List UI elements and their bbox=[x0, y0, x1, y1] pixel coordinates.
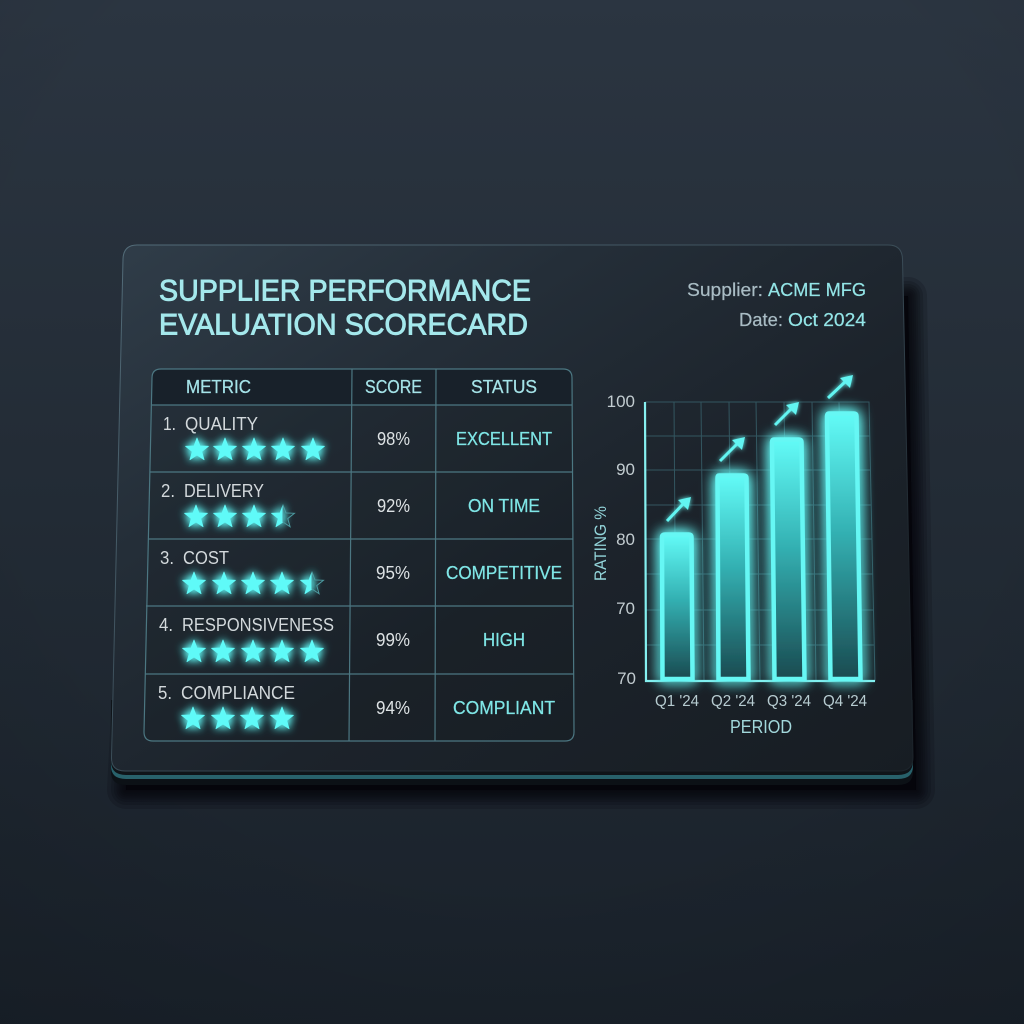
row 4: responsiveness: 4. bbox=[159, 615, 173, 635]
x-axis labels: Q2 '24 bbox=[711, 693, 755, 710]
row 2: delivery: 92% bbox=[377, 496, 410, 516]
y-axis labels: 90 bbox=[616, 460, 635, 479]
stars: quality bbox=[186, 438, 324, 460]
arrow: Q2 trend bbox=[720, 437, 745, 461]
row 1: quality: 1. bbox=[163, 414, 176, 434]
row 3: cost: COMPETITIVE bbox=[446, 563, 562, 583]
row 2: delivery bbox=[161, 481, 540, 527]
row 1: quality: 98% bbox=[377, 429, 410, 449]
supplier and date details: Oct 2024 bbox=[788, 310, 866, 330]
table header labels bbox=[186, 377, 537, 397]
row 2: delivery: DELIVERY bbox=[184, 481, 264, 501]
panel: scorecard bbox=[111, 245, 916, 790]
supplier and date details: Supplier: bbox=[687, 280, 763, 300]
row 5: compliance bbox=[158, 683, 555, 729]
panel surface bbox=[111, 245, 913, 771]
table body tint bbox=[144, 405, 574, 741]
x-axis title: PERIOD bbox=[730, 717, 792, 737]
y-axis title: RATING % bbox=[591, 506, 610, 581]
arrow: Q4 trend bbox=[828, 375, 853, 398]
table header labels: STATUS bbox=[471, 377, 537, 397]
chart grid bbox=[645, 402, 875, 681]
y-axis labels bbox=[607, 392, 636, 688]
chart axes bbox=[645, 402, 875, 681]
arrow: Q3 trend bbox=[775, 402, 799, 425]
row 3: cost: 3. bbox=[160, 548, 174, 568]
y-axis labels: 70 bbox=[617, 669, 636, 688]
x-axis labels bbox=[655, 693, 867, 710]
row 3: cost: COST bbox=[183, 548, 229, 568]
table: metrics bbox=[144, 369, 574, 741]
title: SUPPLIER PERFORMANCE bbox=[159, 274, 531, 308]
row 4: responsiveness: RESPONSIVENESS bbox=[182, 615, 334, 635]
y-axis labels: 100 bbox=[607, 392, 635, 411]
stars: delivery bbox=[185, 505, 283, 527]
row 5: compliance: COMPLIANCE bbox=[181, 683, 295, 703]
x-axis labels: Q4 '24 bbox=[823, 693, 867, 710]
y-axis labels: 70 bbox=[616, 599, 635, 618]
y-axis labels: 80 bbox=[616, 530, 635, 549]
bar: Q3 bbox=[772, 440, 804, 679]
row 3: cost bbox=[160, 548, 562, 594]
row 3: cost: 95% bbox=[376, 563, 410, 583]
title: EVALUATION SCORECARD bbox=[159, 308, 528, 342]
row 4: responsiveness bbox=[159, 615, 525, 662]
row 1: quality: EXCELLENT bbox=[456, 429, 552, 449]
bar: Q4 bbox=[827, 414, 860, 679]
row 5: compliance: 5. bbox=[158, 683, 172, 703]
table header labels: SCORE bbox=[365, 377, 422, 397]
row 5: compliance: COMPLIANT bbox=[453, 698, 555, 718]
table header background bbox=[151, 369, 572, 405]
bar: Q1 bbox=[662, 534, 692, 679]
table header labels: METRIC bbox=[186, 377, 251, 397]
row 2: delivery: ON TIME bbox=[468, 496, 540, 516]
supplier and date details: Date: bbox=[739, 310, 783, 330]
row 5: compliance: 94% bbox=[376, 698, 410, 718]
stars: responsiveness bbox=[183, 640, 323, 662]
x-axis labels: Q1 '24 bbox=[655, 693, 699, 710]
supplier and date details bbox=[687, 280, 866, 330]
stars: compliance bbox=[182, 707, 293, 729]
bar: Q2 bbox=[718, 476, 748, 679]
panel shadow bbox=[126, 296, 916, 790]
row 2: delivery: 2. bbox=[161, 481, 175, 501]
panel base edge bbox=[111, 700, 913, 785]
half star outline: cost bbox=[312, 572, 323, 594]
row 4: responsiveness: 99% bbox=[376, 630, 410, 650]
supplier and date details: ACME MFG bbox=[768, 280, 866, 300]
arrow: Q1 trend bbox=[667, 497, 691, 521]
half star outline: delivery bbox=[283, 505, 294, 527]
title bbox=[159, 274, 531, 342]
x-axis labels: Q3 '24 bbox=[767, 693, 811, 710]
row 1: quality bbox=[163, 414, 552, 460]
row 4: responsiveness: HIGH bbox=[483, 630, 525, 650]
table grid bbox=[144, 369, 574, 741]
row 1: quality: QUALITY bbox=[185, 414, 258, 434]
bar chart: rating by period bbox=[591, 375, 875, 737]
stars: cost bbox=[183, 572, 312, 594]
